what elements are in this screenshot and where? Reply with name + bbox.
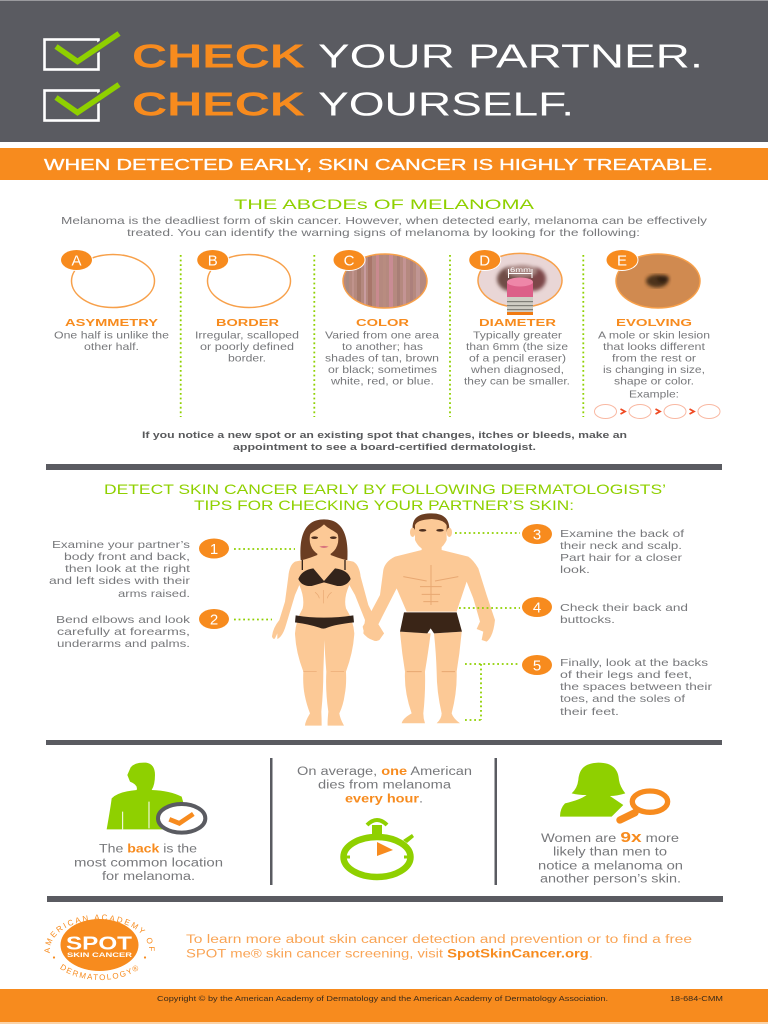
header banner	[0, 0, 768, 142]
panel: border: Irregular, scalloped	[195, 330, 299, 342]
panel: asymmetry	[54, 249, 169, 353]
icon: checkbox two	[44, 84, 119, 120]
step 5: 5	[533, 658, 541, 674]
heading: ABCDEs of melanoma: THE ABCDEs OF MELANOMA	[234, 196, 535, 212]
panel: diameter: than 6mm (the size	[466, 342, 568, 353]
panel: diameter: D	[479, 252, 490, 270]
step 2: 2	[210, 612, 218, 628]
panel: diameter: Typically greater	[473, 330, 563, 342]
step 3: Part hair for a closer	[560, 553, 683, 564]
step 3	[455, 524, 684, 576]
panel: color: C	[344, 252, 355, 270]
step 4: buttocks.	[560, 615, 615, 626]
step 5: Finally, look at the backs	[560, 658, 708, 669]
footer	[0, 989, 768, 1024]
step 2: Bend elbows and look	[56, 615, 191, 626]
panel: color: COLOR	[356, 317, 410, 329]
panel: evolving: is changing in size,	[603, 365, 705, 376]
step 3: their neck and scalp.	[560, 541, 682, 552]
panel: back statistic: most common location	[74, 858, 223, 870]
title line two: YOURSELF.	[318, 86, 574, 122]
panel: evolving: A mole or skin lesion	[598, 330, 710, 342]
intro paragraph: treated. You can identify the warning signs of melanoma by looking for the following:	[127, 228, 640, 239]
panel: evolving: shape or color.	[614, 376, 694, 388]
heading: partner check tips	[104, 481, 666, 513]
panel: asymmetry: One half is unlike the	[54, 330, 169, 342]
illustration: man	[363, 513, 495, 723]
panel: back statistic: for melanoma.	[102, 871, 195, 883]
step 1: Examine your partner’s	[52, 540, 190, 551]
step 1: and left sides with their	[49, 576, 191, 587]
logo: SPOT skin cancer: AMERICAN ACADEMY OF	[44, 914, 155, 954]
icon: back silhouette with check	[107, 763, 205, 833]
panel: mortality statistic: dies from melanoma	[318, 780, 452, 792]
step 4: 4	[533, 600, 541, 616]
logo: SPOT skin cancer	[44, 914, 155, 980]
step 3: look.	[560, 565, 590, 576]
panel: color: Varied from one area	[325, 330, 439, 342]
panel: women statistic: likely than men to	[553, 846, 667, 858]
step 5: the spaces between their	[560, 682, 713, 693]
intro paragraph: Melanoma is the deadliest form of skin cancer. However, when detected early, melanoma can be effectively	[61, 216, 708, 227]
panel: evolving: EVOLVING	[616, 317, 692, 329]
panel: women statistic	[538, 763, 683, 886]
heading: partner check tips: TIPS FOR CHECKING YOUR PARTNER’S SKIN:	[194, 497, 574, 513]
step 2: underarms and palms.	[57, 639, 190, 650]
logo: SPOT skin cancer: DERMATOLOGY®	[60, 964, 138, 980]
step 4: Check their back and	[560, 603, 688, 614]
panel: diameter: DIAMETER	[479, 317, 557, 329]
orange banner: WHEN DETECTED EARLY, SKIN CANCER IS HIGHLY TREATABLE.	[44, 157, 713, 174]
evolving example sequence	[594, 404, 720, 418]
panel: women statistic: Women are 9x more	[541, 829, 679, 846]
step 4	[459, 597, 688, 626]
panel: evolving: from the rest or	[612, 354, 697, 364]
icon: woman silhouette with magnifier	[560, 763, 668, 820]
title line one: YOUR PARTNER.	[318, 38, 703, 74]
step 5	[465, 655, 713, 720]
panel: evolving: Example:	[629, 390, 679, 400]
panel: color	[325, 249, 439, 388]
icon: checkbox one	[44, 34, 119, 70]
panel: border: or poorly defined	[200, 342, 294, 353]
icon: stopwatch	[344, 820, 414, 879]
panel: border: BORDER	[216, 317, 280, 329]
warning note	[142, 430, 627, 453]
panel: diameter	[464, 249, 570, 388]
panel: color: white, red, or blue.	[330, 376, 434, 388]
orange banner	[0, 148, 768, 180]
step 5: of their legs and feet,	[560, 670, 692, 681]
panel: evolving: that looks different	[603, 342, 705, 353]
step 3: Examine the back of	[560, 529, 684, 540]
title line two: CHECK	[132, 86, 305, 122]
step 5: toes, and the soles of	[560, 694, 685, 705]
panel: diameter: they can be smaller.	[464, 376, 570, 388]
panel: women statistic: another person’s skin.	[540, 874, 681, 886]
step 1: body front and back,	[64, 552, 190, 563]
step 1: 1	[210, 541, 218, 558]
panel: diameter: 6mm	[510, 268, 531, 274]
panel: back statistic	[74, 763, 223, 883]
step 5: their feet.	[560, 707, 619, 718]
footer: 18-684-CMM	[670, 994, 723, 1003]
warning note: appointment to see a board-certified dermatologist.	[233, 442, 536, 453]
call to action: To learn more about skin cancer detection and prevention or to find a free	[186, 934, 692, 946]
intro paragraph	[61, 216, 708, 239]
heading: partner check tips: DETECT SKIN CANCER EARLY BY FOLLOWING DERMATOLOGISTS’	[104, 481, 666, 497]
title line one: CHECK	[132, 38, 305, 74]
call to action	[186, 934, 692, 960]
panel: mortality statistic: every hour .	[345, 794, 423, 806]
panel: mortality statistic: On average, one American	[297, 766, 472, 778]
step 3: 3	[533, 526, 541, 544]
panel: evolving: E	[617, 252, 627, 270]
step 1	[49, 538, 295, 600]
panel: asymmetry: ASYMMETRY	[65, 317, 158, 329]
step 1: arms raised.	[118, 589, 190, 600]
panel: color: or black; sometimes	[328, 365, 437, 376]
step 2	[56, 609, 272, 650]
panel: asymmetry: A	[71, 252, 82, 270]
panel: mortality statistic	[297, 766, 472, 879]
panel: diameter: when diagnosed,	[470, 365, 564, 376]
warning note: If you notice a new spot or an existing spot that changes, itches or bleeds, make an	[142, 430, 627, 441]
panel: evolving	[594, 249, 720, 418]
panel: back statistic: The back is the	[99, 844, 197, 856]
panel: women statistic: notice a melanoma on	[538, 860, 683, 872]
logo: SPOT skin cancer: SKIN CANCER	[67, 952, 132, 959]
panel: color: shades of tan, brown	[325, 354, 439, 364]
panel: color: to another; has	[342, 342, 423, 353]
step 2: carefully at forearms,	[57, 627, 190, 638]
panel: asymmetry: other half.	[84, 342, 139, 353]
panel: border: border.	[228, 354, 266, 364]
footer: Copyright © by the American Academy of Dermatology and the American Academy of Dermatology Association.	[157, 994, 608, 1003]
step 1: then look at the right	[65, 564, 190, 575]
call to action: SPOT me® skin cancer screening, visit SpotSkinCancer.org .	[186, 948, 593, 960]
panel: border	[195, 249, 299, 364]
logo: SPOT skin cancer: SPOT	[66, 934, 132, 954]
panel: border: B	[208, 252, 218, 270]
panel: diameter: of a pencil eraser)	[469, 354, 566, 364]
illustration: woman	[272, 513, 495, 726]
